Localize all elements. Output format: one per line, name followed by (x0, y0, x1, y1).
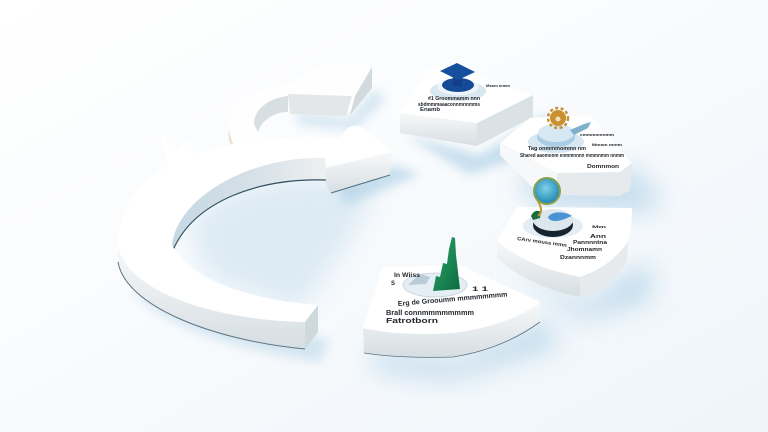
small return arrow (229, 65, 372, 151)
card text: S (391, 281, 395, 287)
card text: Tag onmmmommn nm (528, 146, 587, 152)
soft shadows (130, 88, 665, 380)
arrow head front face (325, 152, 392, 193)
card text: cmmmmnnmm (580, 132, 615, 137)
top face (118, 126, 392, 322)
small arc top face (229, 65, 372, 150)
icon: graduation cap on disc (430, 63, 486, 101)
small arrow front face (288, 94, 352, 116)
card text (520, 132, 624, 170)
card text: Jhomnamn (567, 247, 602, 253)
small arrow side face (350, 67, 372, 115)
card text: Domnmon (587, 164, 619, 170)
card text: #1 Groommamm nnn (428, 96, 480, 102)
icon: green bar chart on disc (403, 237, 467, 297)
card text (386, 273, 508, 325)
card text: Mssm mmm (486, 83, 510, 88)
small arc inner wall (254, 96, 288, 132)
inner wall (172, 158, 326, 250)
panel: graduation cap card (400, 63, 533, 146)
panel: gear card (500, 108, 632, 196)
card text: Mmsm mmm (592, 142, 623, 147)
card text: Pannnntna (573, 240, 607, 246)
card text: Shared aaomonm enmmnnnn mmmnmm nnmm (520, 153, 624, 159)
icon: gear on disc (528, 108, 591, 153)
card text: Dzannnmm (560, 255, 597, 261)
big C arrow (118, 126, 392, 349)
panel: green chart card (363, 237, 540, 357)
card text: Ann (590, 234, 606, 240)
panel: globe card (497, 178, 632, 297)
card text: Brall connmmmmmmmm (386, 310, 474, 317)
card text: In Wiiss (394, 273, 421, 279)
card text: Mm (592, 224, 607, 229)
card text: CArv mouss mmn (517, 236, 567, 249)
card text: Erg de Grooumm mmmmmmmm (398, 291, 508, 308)
card text: Fatrotborn (386, 318, 438, 325)
card text (418, 83, 510, 113)
outer side wall (118, 245, 305, 349)
tail end face (305, 305, 318, 349)
card text: sbdmmmaaaconnmnnmms (418, 102, 480, 108)
card text (517, 224, 607, 261)
icon: globe on disc (523, 178, 583, 238)
card text: Enamb (420, 107, 440, 113)
card text: 1 1 (472, 287, 489, 293)
